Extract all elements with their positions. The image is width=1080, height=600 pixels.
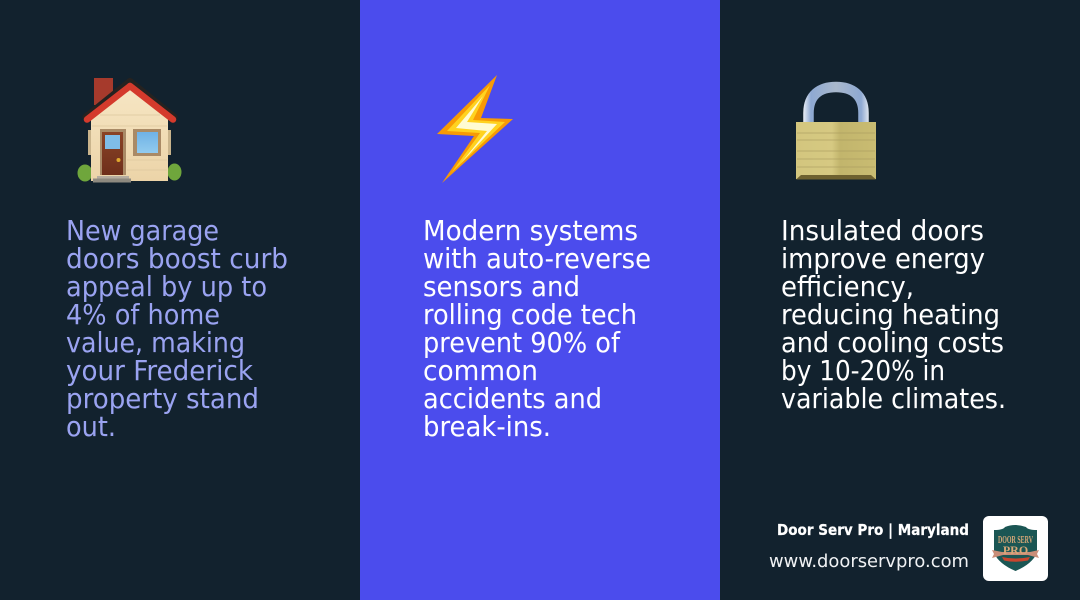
text: curb appeal: 4% of home [66, 298, 220, 331]
text: safety and security: Modern systems [423, 214, 638, 247]
text: energy efficiency: by 10-20% in [781, 354, 945, 387]
text: curb appeal: value, making [66, 326, 245, 359]
text: curb appeal: appeal by up to [66, 270, 267, 303]
text: energy efficiency: reducing heating [781, 298, 1000, 331]
logo: Door Serv Pro badge: DOOR SERV [998, 535, 1033, 546]
text: safety and security: common [423, 354, 538, 387]
text: energy efficiency: variable climates. [781, 382, 1006, 415]
footer: brand name and website: www.doorservpro.com [769, 551, 969, 572]
footer: brand name and website: Door Serv Pro | Maryland [777, 521, 969, 540]
text: safety and security: accidents and [423, 382, 602, 415]
text: energy efficiency [781, 214, 1006, 415]
text: safety and security: sensors and [423, 270, 580, 303]
icon: house [78, 78, 182, 182]
icon: lightning bolt [437, 75, 513, 183]
logo: Door Serv Pro badge: PRO [1003, 543, 1028, 557]
text: safety and security: break-ins. [423, 410, 551, 443]
text: curb appeal: New garage [66, 214, 219, 247]
panel: energy efficiency [720, 0, 1080, 600]
footer: brand name and website [769, 521, 969, 572]
text: energy efficiency: Insulated doors [781, 214, 984, 247]
text: energy efficiency: efficiency, [781, 270, 914, 303]
text: energy efficiency: and cooling costs [781, 326, 1004, 359]
text: curb appeal: out. [66, 410, 116, 443]
text: safety and security: with auto-reverse [423, 242, 651, 275]
text: curb appeal: your Frederick [66, 354, 254, 387]
text: curb appeal: doors boost curb [66, 242, 288, 275]
text: safety and security: prevent 90% of [423, 326, 621, 359]
text: curb appeal [66, 214, 288, 443]
text: safety and security: rolling code tech [423, 298, 637, 331]
text: energy efficiency: improve energy [781, 242, 985, 275]
icon: padlock [796, 87, 876, 180]
text: curb appeal: property stand [66, 382, 259, 415]
panel: curb appeal [0, 0, 360, 600]
panel: safety and security [360, 0, 720, 600]
logo: Door Serv Pro badge [983, 516, 1048, 581]
text: safety and security [423, 214, 651, 443]
